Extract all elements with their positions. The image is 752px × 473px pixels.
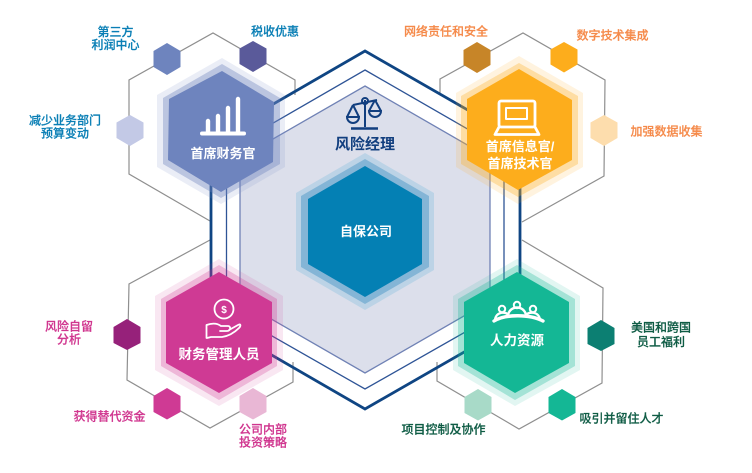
small hexagons: HR cluster bbox=[464, 320, 614, 420]
panel: human resources bbox=[453, 259, 580, 406]
panel: human resources: 人力资源 bbox=[490, 333, 544, 348]
panel: treasury manager bbox=[155, 259, 283, 406]
risk manager large hexagon bbox=[211, 51, 520, 409]
labels: treasury cluster: 分析 bbox=[57, 332, 81, 346]
labels: information cluster: 数字技术集成 bbox=[576, 28, 649, 42]
heading: risk manager: 风险经理 bbox=[335, 135, 395, 153]
small hexagons: finance cluster bbox=[116, 41, 266, 146]
labels: treasury cluster: 风险自留 bbox=[45, 320, 93, 334]
icon: bar chart bbox=[202, 99, 244, 134]
panel: chief information officer: 首席技术官 bbox=[487, 156, 553, 171]
panel: chief information officer bbox=[456, 56, 583, 204]
labels: HR cluster: 员工福利 bbox=[637, 334, 685, 349]
labels: HR cluster: 美国和跨国 bbox=[631, 320, 691, 334]
icon: scales bbox=[347, 98, 381, 128]
labels: HR cluster: 吸引并留住人才 bbox=[579, 410, 664, 426]
gray outline: HR cluster bbox=[437, 240, 603, 429]
icon: dollar sign: $ bbox=[221, 305, 227, 316]
central hexagon: captive company bbox=[296, 153, 434, 310]
labels: finance cluster: 利润中心 bbox=[91, 37, 140, 52]
icon: hand with coin bbox=[206, 300, 240, 338]
labels: finance cluster: 预算变动 bbox=[41, 126, 89, 140]
small hexagons: information cluster bbox=[464, 42, 618, 146]
labels: finance cluster: 税收优惠 bbox=[251, 24, 299, 38]
labels: finance cluster: 减少业务部门 bbox=[29, 112, 101, 128]
labels: HR cluster: 项目控制及协作 bbox=[401, 422, 486, 436]
gray outline: finance cluster bbox=[129, 33, 295, 221]
icon: laptop bbox=[495, 101, 539, 134]
panel: chief financial officer bbox=[157, 58, 285, 204]
panel: chief information officer: 首席信息官/ bbox=[486, 139, 555, 154]
small hexagons: treasury cluster bbox=[114, 319, 266, 420]
labels: finance cluster bbox=[29, 24, 299, 140]
labels: treasury cluster: 获得替代资金 bbox=[73, 408, 146, 424]
icon: three people bbox=[494, 302, 543, 321]
labels: treasury cluster: 投资策略 bbox=[239, 434, 287, 450]
labels: finance cluster: 第三方 bbox=[97, 24, 134, 39]
labels: HR cluster bbox=[401, 320, 691, 436]
labels: information cluster: 加强数据收集 bbox=[630, 124, 703, 138]
gray outline: information cluster bbox=[440, 33, 605, 222]
central hexagon: captive company: 自保公司 bbox=[340, 224, 392, 239]
labels: information cluster: 网络责任和安全 bbox=[404, 24, 488, 38]
labels: information cluster bbox=[404, 24, 703, 138]
panel: treasury manager: 财务管理人员 bbox=[178, 346, 260, 362]
gray outline: treasury cluster bbox=[127, 240, 293, 428]
labels: treasury cluster bbox=[45, 320, 287, 450]
labels: treasury cluster: 公司内部 bbox=[239, 422, 287, 436]
panel: chief financial officer: 首席财务官 bbox=[190, 146, 256, 161]
